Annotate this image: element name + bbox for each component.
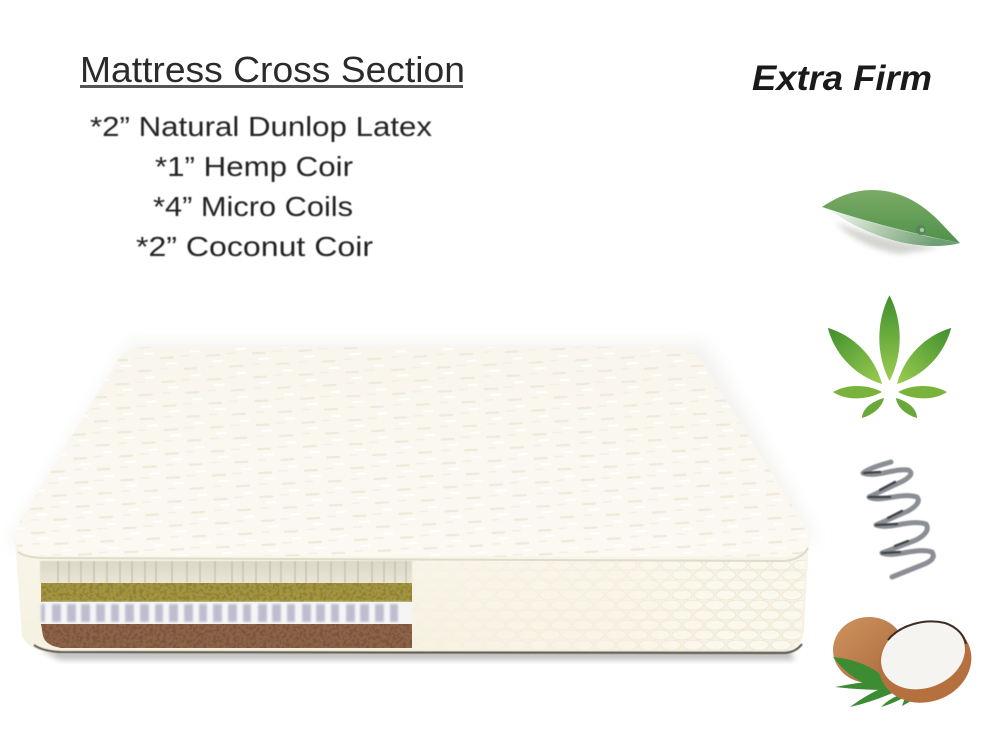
cross-section cutaway [40, 561, 412, 648]
firmness label: Extra Firm: Extra Firm [752, 59, 932, 98]
front side of the mattress [15, 540, 809, 652]
top-edge glow [8, 342, 818, 545]
horizontal blades [833, 386, 882, 398]
layer list: *2” Natural Dunlop Latex [90, 111, 432, 142]
coconut flesh [871, 609, 975, 701]
icon: coconut [833, 609, 982, 715]
layer list: *4” Micro Coils [153, 191, 353, 222]
mattress illustration [8, 342, 818, 660]
icon: hemp leaf [820, 295, 959, 418]
centre blade [879, 295, 900, 381]
icon: natural latex leaf [822, 190, 960, 254]
piping seam [18, 548, 808, 561]
quilted side texture [612, 560, 806, 651]
layer: natural Dunlop latex [40, 561, 412, 584]
layer list [90, 111, 432, 262]
top face of the mattress [16, 347, 809, 557]
icon: micro coil spring [863, 462, 933, 577]
halved coconut shell [868, 609, 982, 715]
palm fronds [833, 657, 913, 707]
layer list: *1” Hemp Coir [155, 151, 353, 182]
lower small blades [862, 398, 884, 418]
layer: hemp coir [41, 583, 412, 602]
title: Mattress Cross Section: Mattress Cross Section [80, 49, 465, 90]
layer: micro coils [41, 602, 412, 624]
upper side blades [820, 321, 889, 391]
base edge line [34, 644, 802, 653]
layer: coconut coir [41, 624, 412, 648]
layer list: *2” Coconut Coir [136, 231, 373, 262]
dark shell rim [888, 621, 966, 644]
whole coconut [833, 617, 905, 683]
floor shadow [40, 650, 795, 660]
